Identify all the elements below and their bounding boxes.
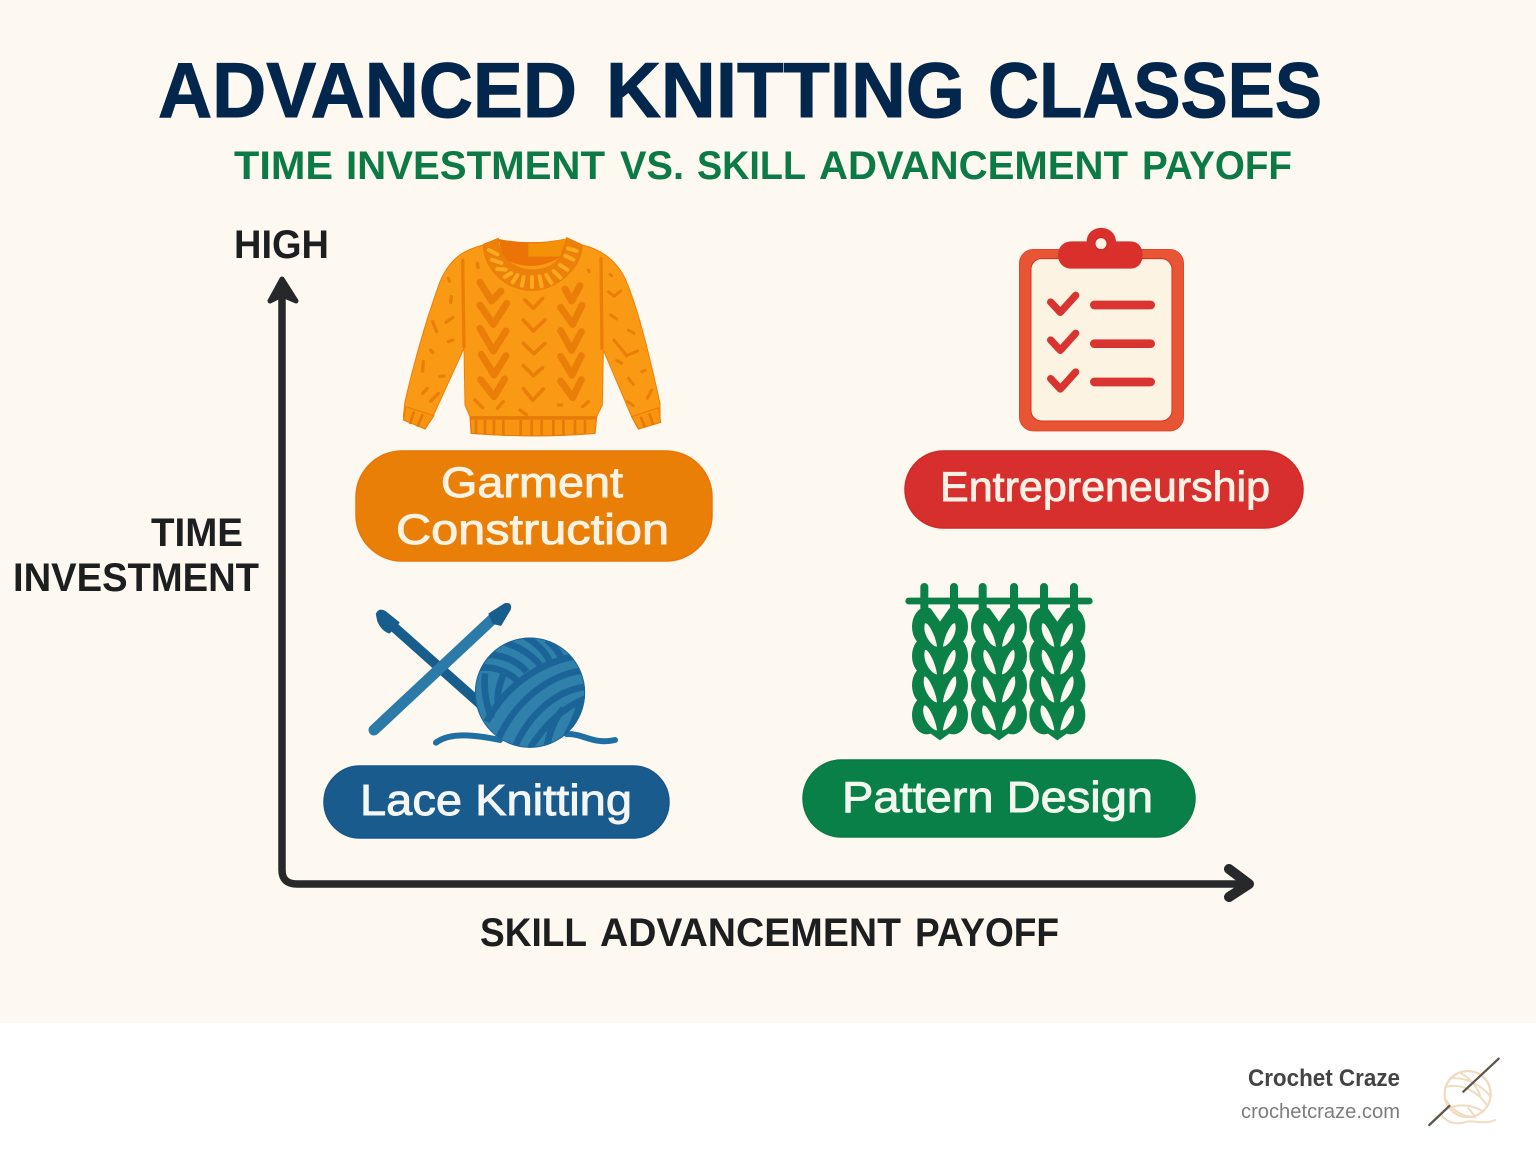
back needle xyxy=(377,610,483,707)
subtitle: VS. xyxy=(620,144,684,188)
sweater collar xyxy=(483,238,582,290)
pill: pattern design: Pattern Design xyxy=(842,773,1153,822)
y axis high label: HIGH xyxy=(234,223,329,267)
subtitle: TIME xyxy=(234,144,333,188)
subtitle: ADVANCEMENT xyxy=(819,144,1128,188)
icon: brand logo yarn and hook xyxy=(1429,1059,1499,1125)
horizontal needle bar xyxy=(909,591,1089,611)
title: CLASSES xyxy=(988,46,1322,134)
collar ribs xyxy=(489,248,577,287)
rib lines xyxy=(410,412,653,436)
checklist xyxy=(1051,295,1151,389)
subtitle: PAYOFF xyxy=(1142,144,1292,188)
pill: garment construction xyxy=(356,451,712,561)
subtitle xyxy=(234,144,1292,188)
front needle xyxy=(374,604,510,730)
clipboard clip xyxy=(1058,228,1143,269)
subtitle: INVESTMENT xyxy=(346,144,605,188)
pill: lace knitting: Lace Knitting xyxy=(360,776,632,825)
x axis title: PAYOFF xyxy=(915,911,1059,955)
pill: lace knitting xyxy=(324,766,669,838)
x axis title: SKILL xyxy=(480,911,587,955)
clip hole xyxy=(1095,238,1107,250)
title: ADVANCED xyxy=(158,46,577,134)
brand url: crochetcraze.com xyxy=(1241,1101,1400,1123)
icon: knit stitches xyxy=(909,587,1089,740)
pill: pattern design xyxy=(803,760,1195,837)
stitch column 3 xyxy=(1029,606,1085,740)
sweater hem and cuffs xyxy=(403,407,661,436)
axes with arrows xyxy=(270,279,1249,897)
footer band xyxy=(0,1023,1536,1154)
stitch column 1 xyxy=(912,606,968,740)
y axis title xyxy=(13,511,259,600)
subtitle: SKILL xyxy=(697,144,806,188)
sweater neck xyxy=(498,238,567,266)
x axis title: ADVANCEMENT xyxy=(600,911,901,955)
icon: clipboard xyxy=(1019,228,1184,431)
sweater seams and cables xyxy=(423,258,652,415)
title xyxy=(158,46,1322,134)
icon: sweater xyxy=(403,238,661,436)
yarn ball xyxy=(475,637,587,748)
clipboard paper xyxy=(1031,259,1172,421)
brand name: Crochet Craze xyxy=(1248,1065,1400,1092)
icon: needles and yarn ball xyxy=(374,604,615,748)
y axis title: TIME xyxy=(151,511,243,555)
title: KNITTING xyxy=(606,46,965,134)
stitch column 2 xyxy=(971,606,1027,740)
x axis title xyxy=(480,911,1059,955)
yarn tail xyxy=(436,734,615,743)
y axis title: INVESTMENT xyxy=(13,556,259,600)
pill: garment construction: Garment xyxy=(441,459,623,507)
pill: entrepreneurship xyxy=(905,451,1303,528)
pill: garment construction: Construction xyxy=(396,506,669,554)
pill: entrepreneurship: Entrepreneurship xyxy=(940,463,1270,510)
vertical pegs xyxy=(924,587,1074,614)
